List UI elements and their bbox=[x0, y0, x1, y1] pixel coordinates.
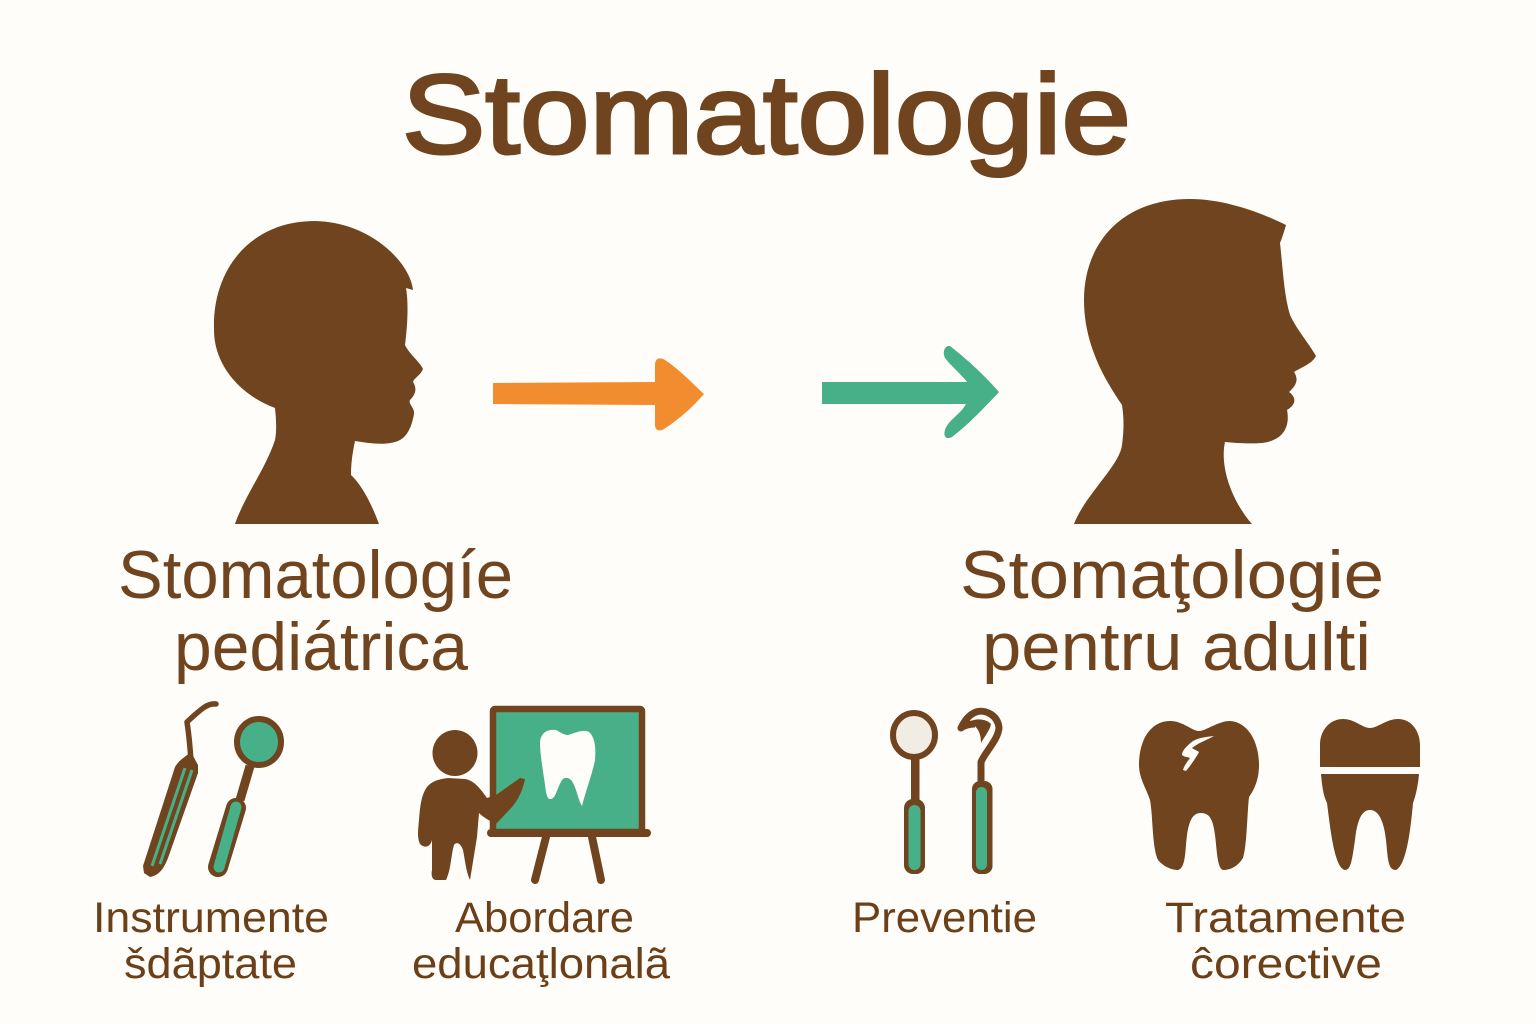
arrow: green bbox=[822, 346, 999, 438]
icon: prevention instruments bbox=[893, 711, 999, 874]
label: prevention: Preventie bbox=[852, 894, 1037, 942]
teacher figure bbox=[418, 730, 525, 880]
label: adapted instruments: šdãptate bbox=[124, 940, 297, 988]
label: corrective treatments: ĉorective bbox=[1190, 940, 1382, 988]
label: adapted instruments bbox=[93, 894, 329, 988]
icon: child head silhouette bbox=[214, 221, 423, 524]
label: corrective treatments bbox=[1165, 894, 1406, 988]
heading: adult dentistry bbox=[960, 537, 1384, 685]
icon: adapted instruments bbox=[143, 704, 281, 877]
icon: cracked tooth bbox=[1139, 721, 1259, 870]
title: Stomatologie bbox=[402, 52, 1131, 177]
heading: adult dentistry: pentru adulti bbox=[982, 609, 1371, 685]
explorer bbox=[143, 704, 216, 877]
heading: pediatric dentistry: Stomatologíe bbox=[118, 537, 513, 613]
label: educational approach: educaţlonalã bbox=[412, 940, 670, 988]
heading: pediatric dentistry bbox=[118, 537, 513, 685]
label: educational approach: Abordare bbox=[455, 894, 634, 942]
dental mirror bbox=[218, 719, 281, 867]
heading: pediatric dentistry: pediátrica bbox=[174, 609, 468, 685]
label: corrective treatments: Tratamente bbox=[1165, 894, 1406, 942]
label: educational approach bbox=[412, 894, 670, 988]
board bbox=[487, 709, 651, 880]
label: adapted instruments: Instrumente bbox=[93, 894, 329, 942]
icon: teacher with board bbox=[418, 709, 651, 880]
dental mirror bbox=[893, 713, 935, 874]
arrow: orange bbox=[493, 358, 704, 430]
icon: tooth with crown bbox=[1320, 719, 1420, 870]
heading: adult dentistry: Stomaţologie bbox=[960, 537, 1384, 613]
probe bbox=[961, 711, 999, 874]
icon: adult head silhouette bbox=[1074, 199, 1316, 524]
